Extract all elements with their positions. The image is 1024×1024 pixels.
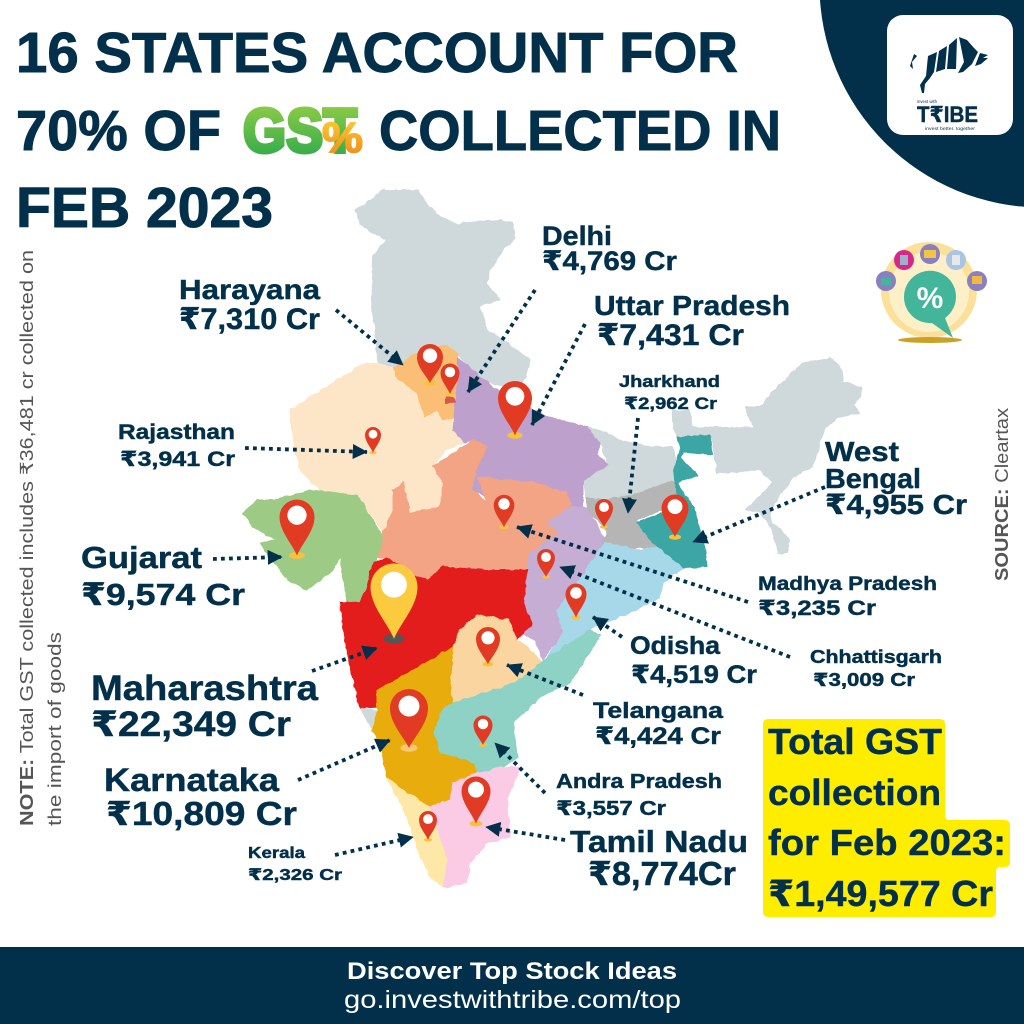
pin: West Bengal (662, 494, 688, 540)
label: Delhi: Delhi (542, 221, 612, 251)
label: Uttar Pradesh: Uttar Pradesh (594, 290, 790, 321)
label: Madhya Pradesh: Madhya Pradesh (758, 574, 937, 595)
label: Telangana: ₹4,424 Cr (595, 723, 721, 750)
label: Telangana (593, 698, 724, 750)
label: Madhya Pradesh: ₹3,235 Cr (758, 597, 876, 620)
note: vertical text (17, 250, 65, 826)
icon: bull logo (910, 37, 988, 93)
label: Karnataka: ₹10,809 Cr (106, 795, 297, 832)
source: vertical text: SOURCE: Cleartax (992, 408, 1012, 581)
pin: Madhya Pradesh (494, 495, 514, 529)
state: Chhattisgarh (520, 507, 605, 660)
pin: Odisha (566, 584, 586, 620)
state: Odisha (547, 543, 683, 658)
pin: Delhi (440, 364, 460, 396)
label: Delhi: ₹4,769 Cr (542, 246, 678, 276)
arrow: Haryana (336, 310, 403, 365)
pin: Jharkhand (595, 499, 613, 529)
label: West Bengal: ₹4,955 Cr (825, 489, 967, 520)
label: Chhattisgarh: Chhattisgarh (810, 647, 942, 667)
pin: Chhattisgarh (537, 549, 555, 579)
label: Andhra Pradesh (556, 771, 722, 820)
title: 16 STATES ACCOUNT FOR (16, 21, 738, 85)
label: Odisha (630, 632, 757, 689)
callout: total GST collection: Total GST (768, 721, 942, 762)
callout: total GST collection: ₹1,49,577 Cr (768, 873, 993, 914)
arrow: Kerala (335, 837, 413, 855)
label: Jharkhand (619, 372, 720, 413)
label: Maharashtra: Maharashtra (91, 669, 319, 708)
label: Gujarat: Gujarat (81, 540, 202, 575)
label: Rajasthan (118, 421, 235, 471)
corner logo panel (820, 0, 1024, 208)
state: Delhi (445, 397, 456, 404)
label: Odisha: Odisha (630, 632, 721, 660)
label: Tamil Nadu: Tamil Nadu (570, 824, 748, 859)
label: West Bengal: Bengal (825, 463, 921, 494)
pin: Haryana (417, 344, 443, 386)
label: Kerala (248, 845, 342, 884)
label: Karnataka: Karnataka (104, 762, 279, 798)
arrow: Uttar Pradesh (532, 324, 585, 425)
state: Kerala (387, 778, 448, 887)
pin: Tamil Nadu (462, 776, 490, 827)
title (16, 21, 781, 240)
label: West Bengal (825, 436, 967, 520)
logo wordmark: T₹IBE (917, 102, 978, 127)
logo wordmark: invest with (917, 99, 937, 104)
label: West Bengal: West (825, 436, 899, 467)
label: Haryana (179, 274, 320, 336)
arrow: West Bengal (693, 487, 825, 542)
state: Haryana (393, 345, 458, 420)
arrow: Delhi (468, 290, 535, 392)
title: 70% OF (16, 99, 221, 163)
label: Karnataka (104, 762, 297, 832)
state: Goa (360, 708, 377, 730)
location pins (280, 344, 688, 842)
region: north-east states (673, 358, 862, 553)
state: Madhya Pradesh (377, 440, 570, 580)
icon: tax percent illustration: % (917, 282, 943, 315)
icon: GST percent wordmark: GST (243, 97, 357, 166)
callout: total GST collection: collection (768, 772, 941, 813)
arrow: Rajasthan (245, 448, 367, 452)
callout: total GST collection (763, 719, 1010, 917)
arrow: Madhya Pradesh (517, 527, 748, 602)
note: vertical text: NOTE: Total GST collected includes ₹36,481 cr collected on (17, 250, 37, 826)
label: Maharashtra: ₹22,349 Cr (91, 705, 291, 744)
dotted arrows (213, 290, 825, 855)
icon: GST percent wordmark: % (322, 114, 363, 162)
logo wordmark: invest better. together (925, 126, 976, 131)
footer band: Discover Top Stock Ideas (347, 958, 677, 985)
arrow: Tamil Nadu (486, 827, 565, 840)
state: Maharashtra (340, 558, 532, 708)
icon: tax percent illustration (876, 242, 987, 343)
label: Gujarat: ₹9,574 Cr (81, 577, 245, 612)
label: Rajasthan: ₹3,941 Cr (120, 448, 235, 471)
state: West Bengal (637, 435, 712, 568)
arrow: Karnataka (298, 740, 390, 780)
footer band (0, 947, 1024, 1024)
label: Madhya Pradesh (758, 574, 937, 620)
map of India (243, 190, 862, 888)
label: Kerala: Kerala (248, 845, 305, 862)
pin: Gujarat (280, 500, 314, 559)
label: Gujarat (81, 540, 245, 612)
label: Haryana: ₹7,310 Cr (179, 303, 320, 336)
arrow: Odisha (593, 617, 622, 637)
title: FEB 2023 (16, 176, 273, 240)
label: Andhra Pradesh: Andra Pradesh (556, 771, 722, 793)
label: Tamil Nadu: ₹8,774Cr (588, 855, 736, 892)
label: Jharkhand: Jharkhand (619, 372, 720, 391)
region: Bihar (583, 427, 680, 500)
label: Uttar Pradesh: ₹7,431 Cr (597, 319, 744, 352)
pin: Kerala (419, 811, 437, 842)
state: Jharkhand (587, 480, 677, 557)
pin: Andhra Pradesh (474, 716, 492, 747)
label: Uttar Pradesh (594, 290, 790, 352)
state: Karnataka (372, 647, 477, 807)
label: Kerala: ₹2,326 Cr (248, 867, 342, 884)
state: Gujarat (243, 490, 383, 602)
label: Odisha: ₹4,519 Cr (631, 661, 757, 689)
arrow: Jharkhand (628, 418, 638, 513)
label: Andhra Pradesh: ₹3,557 Cr (556, 798, 666, 820)
region: northern states (355, 190, 530, 390)
state: Rajasthan (290, 363, 465, 532)
title: COLLECTED IN (379, 99, 781, 163)
arrow: Andhra Pradesh (495, 743, 545, 793)
state: Tamil Nadu (430, 767, 520, 888)
state: Uttar Pradesh (453, 358, 608, 510)
arrow: Maharashtra (312, 648, 377, 671)
state: Andhra Pradesh (433, 630, 600, 773)
label: Chhattisgarh: ₹3,009 Cr (813, 670, 915, 690)
pin: Telangana (476, 627, 500, 667)
label: Haryana: Harayana (179, 274, 320, 305)
label: Maharashtra (91, 669, 319, 744)
arrow: Telangana (507, 665, 583, 695)
note: vertical text: the import of goods (45, 632, 65, 826)
label: Jharkhand: ₹2,962 Cr (624, 394, 717, 413)
arrow: Chhattisgarh (560, 567, 790, 657)
pin: Rajasthan (365, 427, 381, 454)
label: Rajasthan: Rajasthan (118, 421, 235, 444)
state: Telangana (450, 615, 542, 703)
label: Chhattisgarh (810, 647, 942, 690)
arrow: Gujarat (213, 557, 282, 559)
logo card (887, 15, 1013, 135)
pin: Karnataka (390, 689, 428, 752)
label: Telangana: Telangana (593, 698, 724, 723)
label: Delhi (542, 221, 678, 276)
callout: total GST collection: for Feb 2023: (768, 822, 1006, 863)
pin: Uttar Pradesh (498, 381, 532, 439)
label: Tamil Nadu (570, 824, 748, 892)
footer band: go.investwithtribe.com/top (344, 986, 681, 1014)
pin: Maharashtra (370, 564, 418, 643)
